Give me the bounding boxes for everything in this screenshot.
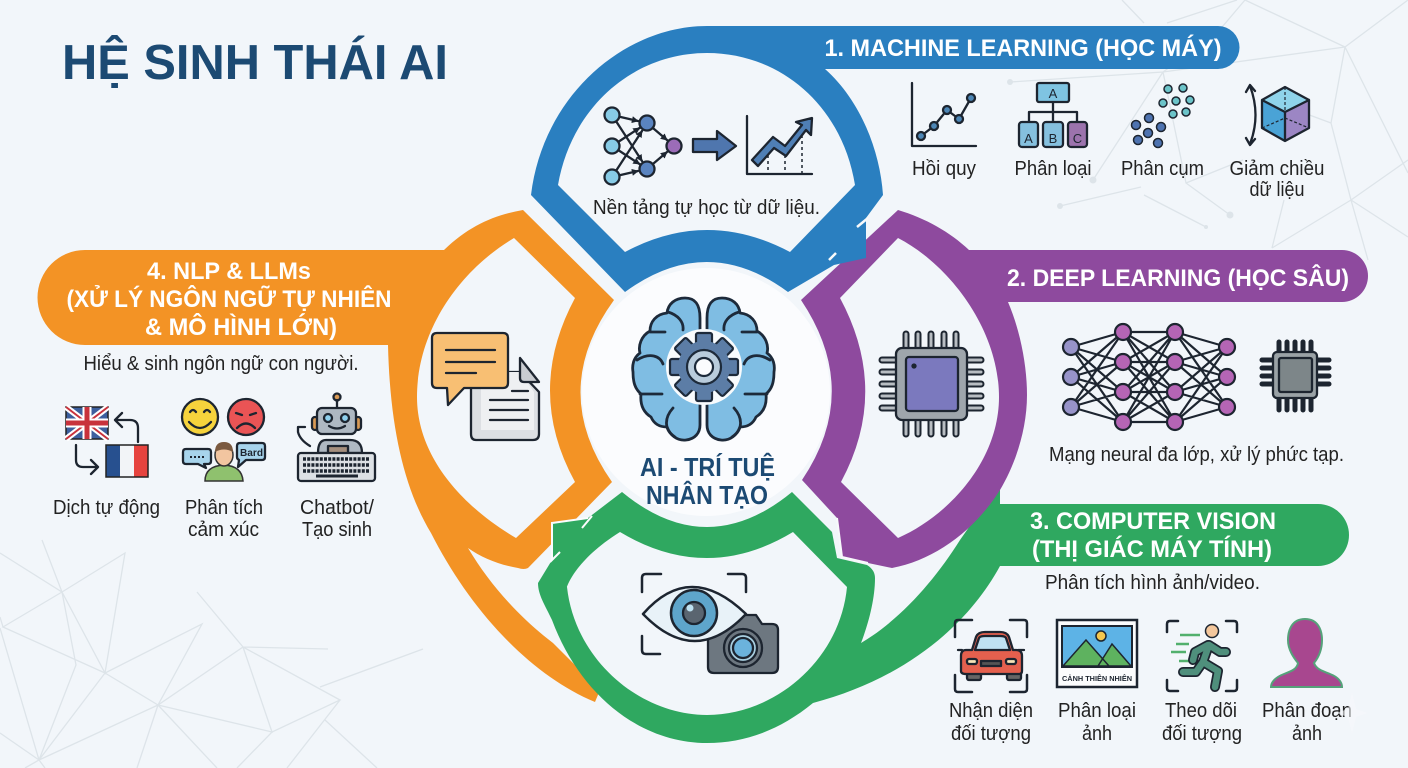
label: image segmentation	[1262, 700, 1352, 745]
label: image classification: ảnh	[1082, 723, 1112, 745]
arrow notch edge	[837, 518, 868, 563]
description: Hiểu & sinh ngôn ngữ con người.	[84, 353, 358, 375]
label: object detection	[949, 700, 1033, 745]
panel: machine learning ring	[531, 26, 1324, 292]
panel: deep learning ring	[801, 210, 1368, 568]
panel: computer vision ring	[538, 483, 1352, 745]
icon: car detection	[955, 620, 1027, 692]
header text: (THỊ GIÁC MÁY TÍNH)	[1032, 535, 1272, 563]
icon: classification tree: A	[1049, 86, 1058, 101]
label: sentiment analysis	[185, 497, 263, 541]
icon: clustering	[1132, 84, 1194, 148]
label: object tracking: Theo dõi	[1165, 700, 1237, 722]
label: image segmentation: ảnh	[1292, 723, 1322, 745]
icon: neural net to growth chart	[604, 108, 812, 184]
purple ring and header	[801, 210, 1368, 568]
label: image classification: Phân loại	[1058, 700, 1136, 722]
icon: eye and camera	[642, 574, 778, 673]
icon: classification tree: A	[1024, 131, 1033, 146]
icon: neural network	[1063, 324, 1235, 430]
title: HỆ SINH THÁI AI	[62, 35, 448, 90]
label: image segmentation: Phân đoạn	[1262, 700, 1352, 722]
icon: image segmentation silhouette	[1271, 619, 1342, 687]
label: chatbot: Tạo sinh	[302, 519, 372, 541]
header text: 1. MACHINE LEARNING (HỌC MÁY)	[824, 34, 1222, 62]
label: sentiment analysis: cảm xúc	[188, 519, 259, 541]
label: object detection: Nhận diện	[949, 700, 1033, 722]
icon: dimensionality reduction cube	[1246, 85, 1309, 145]
label: chatbot: Chatbot/	[300, 497, 374, 519]
icon: chat and document	[432, 333, 539, 440]
center heading: NHÂN TẠO	[646, 480, 768, 510]
icon: classification tree: C	[1073, 131, 1082, 146]
description: Phân tích hình ảnh/video.	[1045, 572, 1260, 594]
label: clustering: Phân cụm	[1121, 158, 1204, 180]
icon: small chip	[1262, 342, 1329, 410]
label: object tracking	[1162, 700, 1242, 745]
header text	[1030, 508, 1276, 563]
icon: object tracking runner	[1167, 621, 1237, 691]
label: dimensionality reduction: Giảm chiều	[1230, 158, 1324, 180]
central white circle	[582, 268, 830, 516]
header text: 2. DEEP LEARNING (HỌC SÂU)	[1007, 264, 1349, 292]
icon: brain with gear	[633, 298, 774, 440]
icon: sentiment faces and person	[182, 399, 265, 481]
label: classification: Phân loại	[1014, 158, 1092, 180]
green ring and header	[538, 483, 1349, 743]
arrowhead edge	[829, 218, 868, 260]
panel: central AI brain	[633, 298, 775, 510]
header text: & MÔ HÌNH LỚN)	[145, 313, 337, 341]
icon: large chip	[882, 334, 981, 434]
icon: classification tree: B	[1049, 131, 1057, 146]
center heading	[640, 452, 775, 510]
label: dimensionality reduction	[1230, 158, 1324, 201]
label: object detection: đối tượng	[951, 723, 1031, 745]
label: object tracking: đối tượng	[1162, 723, 1242, 745]
blue ring and header	[531, 26, 1240, 292]
header text: (XỬ LÝ NGÔN NGỮ TỰ NHIÊN	[66, 284, 392, 313]
description: Nền tảng tự học từ dữ liệu.	[593, 197, 820, 219]
center heading: AI - TRÍ TUỆ	[640, 452, 775, 482]
header text	[66, 258, 392, 341]
arrowhead edge	[550, 516, 592, 562]
label: sentiment analysis: Phân tích	[185, 497, 263, 519]
orange ring and header	[38, 210, 614, 702]
label: dimensionality reduction: dữ liệu	[1250, 179, 1304, 201]
header text: 3. COMPUTER VISION	[1030, 508, 1276, 535]
icon: classification tree	[1019, 83, 1087, 147]
icon: regression	[912, 83, 976, 146]
icon: sentiment faces and person: Bard	[240, 448, 263, 459]
icon: chatbot	[298, 394, 375, 481]
label: regression: Hồi quy	[912, 158, 976, 180]
icon: image classification	[1057, 620, 1137, 687]
icon: translation flags	[66, 407, 148, 477]
header text: 4. NLP & LLMs	[147, 258, 311, 285]
label: image classification	[1058, 700, 1136, 745]
panel: NLP ring	[38, 210, 614, 702]
label: automatic translation: Dịch tự động	[53, 497, 160, 519]
label: chatbot	[300, 497, 374, 541]
description: Mạng neural đa lớp, xử lý phức tạp.	[1049, 444, 1344, 466]
icon: image classification: CẢNH THIÊN NHIÊN	[1062, 674, 1132, 683]
